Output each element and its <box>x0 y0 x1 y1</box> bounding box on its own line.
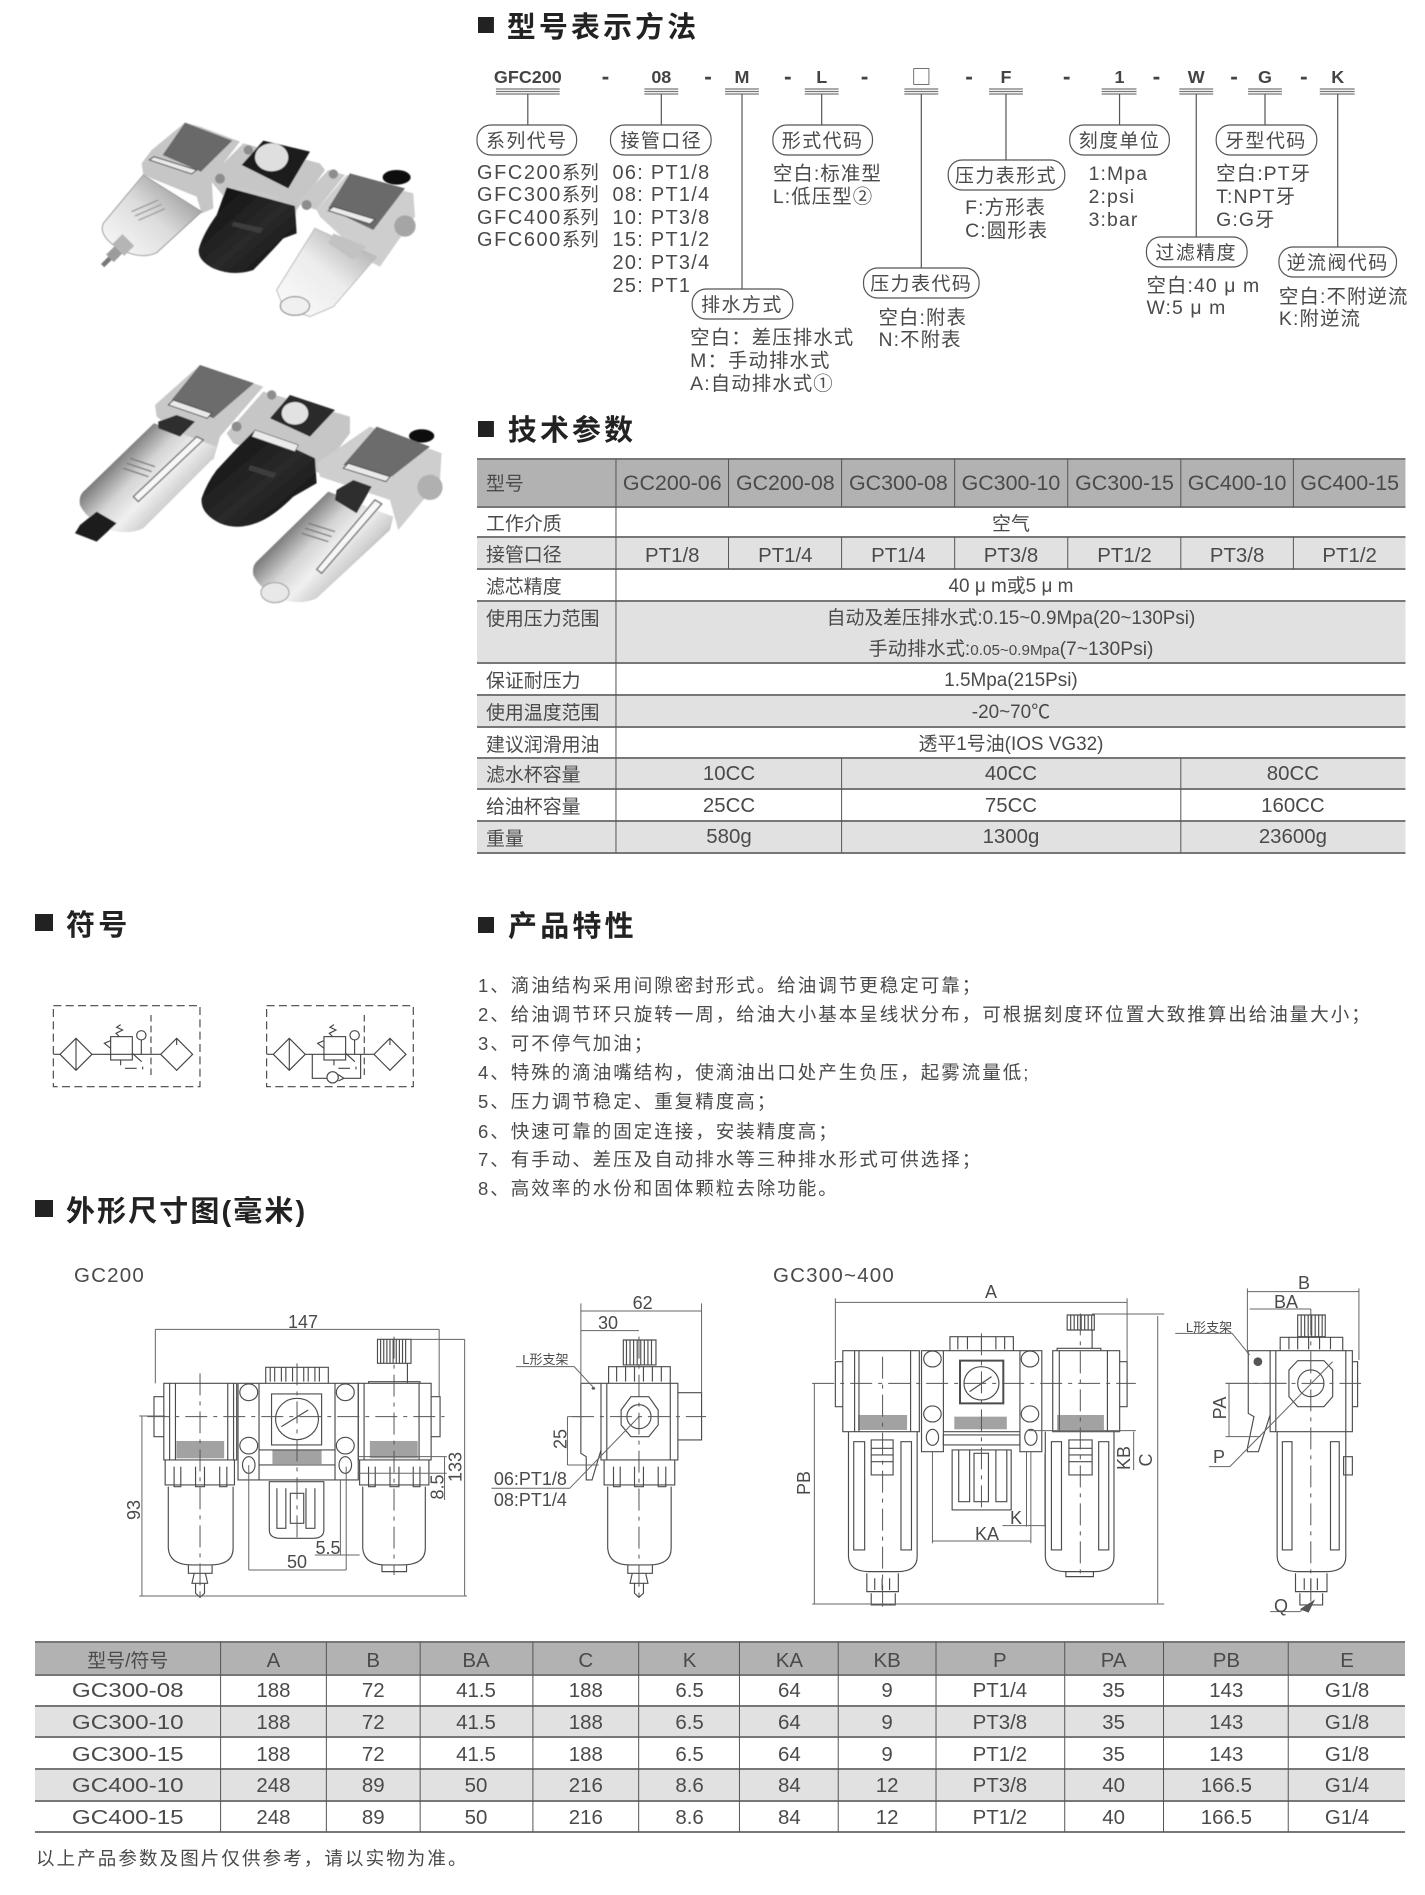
table: dimensions: 84 <box>778 1774 801 1797</box>
dimension labels: GC200: 93 <box>124 1500 144 1520</box>
table: dimensions: 35 <box>1102 1743 1125 1766</box>
label: GC200: GC200 <box>74 1264 145 1287</box>
table: dimensions: 166.5 <box>1201 1774 1252 1797</box>
table: dimensions: 188 <box>256 1711 291 1734</box>
text block: feature list: 6、快速可靠的固定连接，安装精度高； <box>478 1121 839 1142</box>
table: dimensions: 72 <box>362 1743 385 1766</box>
panel: technical parameters <box>477 415 1405 853</box>
dimension labels: GC200: 5.5 <box>315 1538 341 1558</box>
table: technical parameters: -20~70℃ <box>972 702 1050 723</box>
table: dimensions: 6.5 <box>675 1711 704 1734</box>
code string <box>494 61 1355 289</box>
table: dimensions: PT1/4 <box>973 1679 1027 1702</box>
table: technical parameters: 25CC <box>703 794 755 817</box>
table: dimensions: 188 <box>256 1679 291 1702</box>
table: dimensions: K <box>683 1649 697 1672</box>
drawing: GC200 front view <box>139 1329 467 1600</box>
dimension labels: GC200: 8.5 <box>428 1474 448 1500</box>
callout: check valve code: 逆流阀代码 <box>1287 252 1389 274</box>
code string: - <box>602 63 609 89</box>
text block: feature list: 4、特殊的滴油嘴结构，使滴油出口处产生负压，起雾流量低; <box>478 1062 1030 1083</box>
table: technical parameters: 建议润滑用油 <box>486 734 599 756</box>
table: technical parameters: 1300g <box>983 825 1039 848</box>
table: dimensions: 9 <box>881 1743 893 1766</box>
text block: feature list: 8、高效率的水份和固体颗粒去除功能。 <box>478 1178 839 1199</box>
dimension labels: GC300~400: B <box>1298 1273 1310 1293</box>
drawing: GC300~400 side view <box>1175 1288 1361 1613</box>
code string: GFC200 <box>494 67 562 87</box>
table: technical parameters: PT3/8 <box>984 544 1038 567</box>
dimension labels: GC300~400: Q <box>1274 1596 1288 1616</box>
table: dimensions: 9 <box>881 1679 893 1702</box>
callout: check valve code: K:附逆流 <box>1279 308 1361 330</box>
table: technical parameters: GC300-10 <box>962 471 1060 495</box>
callout: gauge form: 压力表形式 <box>955 165 1057 187</box>
dimension labels: GC200: 147 <box>288 1312 318 1332</box>
dimension labels: GC200: 62 <box>633 1293 653 1313</box>
table: dimensions: 35 <box>1102 1711 1125 1734</box>
dimension labels: GC200 <box>124 1293 653 1572</box>
table: dimensions: KA <box>776 1649 803 1672</box>
text block: feature list: 3、可不停气加油； <box>478 1033 654 1054</box>
table: dimensions: 216 <box>569 1774 603 1797</box>
table: dimensions: PT1/2 <box>973 1743 1027 1766</box>
dimension labels: GC300~400: BA <box>1274 1292 1298 1312</box>
table: technical parameters: 75CC <box>985 794 1037 817</box>
table: dimensions: 35 <box>1102 1679 1125 1702</box>
heading: product features: 产品特性 <box>508 910 637 943</box>
table: dimensions: 188 <box>256 1743 291 1766</box>
table: dimensions: G1/4 <box>1325 1806 1369 1829</box>
code string: L <box>816 67 827 87</box>
table: dimensions: 64 <box>778 1743 801 1766</box>
callout: thread code: 牙型代码 <box>1225 130 1307 152</box>
callout: form code <box>773 125 882 208</box>
code string: - <box>861 63 868 89</box>
heading: outline dimensions: 外形尺寸图(毫米) <box>66 1195 307 1228</box>
table: technical parameters: PT1/2 <box>1322 544 1377 567</box>
code string: M <box>735 67 749 87</box>
code string: W <box>1188 67 1205 87</box>
dimension labels: GC300~400: KB <box>1114 1446 1134 1470</box>
callout: drain type: 排水方式 <box>701 294 783 316</box>
callout: form code: 空白:标准型 <box>773 163 882 185</box>
callout: drain type <box>690 289 854 395</box>
table: technical parameters: 接管口径 <box>486 544 562 566</box>
callout: scale unit: 1:Mpa <box>1089 163 1148 185</box>
dimension labels: GC300~400: P <box>1213 1447 1225 1467</box>
table: dimensions: A <box>267 1649 281 1672</box>
drawing: GC200 <box>74 1264 706 1600</box>
table: technical parameters: PT1/8 <box>645 544 699 567</box>
dimension labels: GC300~400: C <box>1136 1454 1156 1466</box>
table: dimensions: 64 <box>778 1711 801 1734</box>
callout: scale unit: 3:bar <box>1089 209 1138 231</box>
callout: gauge form <box>948 160 1065 242</box>
table: technical parameters: 给油杯容量 <box>486 796 581 818</box>
dimension labels: GC300~400: L形支架 <box>1186 1320 1232 1335</box>
table: dimensions: 72 <box>362 1711 385 1734</box>
dimension labels: GC300~400: KA <box>975 1524 999 1544</box>
callout: port size <box>610 125 711 297</box>
icon: circuit symbol standard <box>53 1006 200 1087</box>
dimension labels: GC200: 08:PT1/4 <box>494 1490 567 1510</box>
table: technical parameters: 空气 <box>992 513 1030 535</box>
code string: - <box>1063 63 1071 89</box>
table: dimensions: 型号/符号 <box>87 1650 168 1672</box>
callout: drain type: 空白：差压排水式 <box>690 327 854 349</box>
dimension labels: GC300~400: A <box>985 1282 997 1302</box>
table: dimensions: 40 <box>1102 1806 1125 1829</box>
dimension labels: GC300~400: PA <box>1210 1397 1230 1419</box>
table: technical parameters: PT1/4 <box>871 544 926 567</box>
callout: drain type: M：手动排水式 <box>690 350 831 372</box>
callout: series code: GFC400系列 <box>477 207 599 229</box>
table: dimensions: 248 <box>256 1774 291 1797</box>
table: dimensions: 40 <box>1102 1774 1125 1797</box>
dimension labels: GC200: 25 <box>550 1429 570 1449</box>
icon: circuit symbol with check valve <box>267 1006 413 1087</box>
callout: scale unit <box>1070 125 1169 231</box>
callout: gauge code <box>864 268 979 351</box>
dimension labels: GC300~400: PB <box>794 1471 814 1495</box>
table: dimensions: 8.6 <box>675 1806 704 1829</box>
code string: F <box>1001 67 1011 87</box>
table: technical parameters: 透平1号油(IOS VG32) <box>918 733 1103 755</box>
table: technical parameters: 80CC <box>1267 762 1319 785</box>
dimension labels: GC200: 06:PT1/8 <box>494 1469 567 1489</box>
table: dimensions: G1/8 <box>1325 1743 1369 1766</box>
table: technical parameters: GC400-15 <box>1300 471 1399 495</box>
code string: 08 <box>651 67 671 87</box>
callout: thread code: 空白:PT牙 <box>1216 163 1311 185</box>
table: technical parameters: 使用温度范围 <box>486 702 599 724</box>
table: dimensions: 84 <box>778 1806 801 1829</box>
code string: K <box>1331 67 1344 87</box>
code string: G <box>1258 67 1272 87</box>
table: dimensions: G1/4 <box>1325 1774 1369 1797</box>
dimension labels: GC200: 133 <box>446 1452 466 1482</box>
dimension labels: GC300~400: K <box>1010 1508 1022 1528</box>
panel: symbols <box>35 909 413 1087</box>
table: technical parameters: 1.5Mpa(215Psi) <box>944 670 1078 691</box>
table: dimensions: G1/8 <box>1325 1711 1369 1734</box>
table: technical parameters: GC300-08 <box>849 471 948 495</box>
dimension labels: GC200: L形支架 <box>522 1352 569 1367</box>
callout: thread code <box>1216 125 1317 231</box>
callout: port size: 20: PT3/4 <box>612 252 710 274</box>
callout: check valve code <box>1279 247 1409 330</box>
callout: filter precision: W:5 μ m <box>1146 297 1226 319</box>
callout: gauge form: C:圆形表 <box>965 220 1048 242</box>
table: dimensions: 41.5 <box>456 1679 496 1702</box>
table: technical parameters: 使用压力范围 <box>486 608 599 630</box>
panel: model code <box>477 12 1409 395</box>
callout: port size: 15: PT1/2 <box>612 229 710 251</box>
table: technical parameters: PT3/8 <box>1210 544 1264 567</box>
table: technical parameters: GC300-15 <box>1075 471 1174 495</box>
table: dimensions: GC300-10 <box>72 1711 184 1734</box>
callout: filter precision: 空白:40 μ m <box>1146 275 1260 297</box>
table: dimensions: 50 <box>465 1806 487 1829</box>
table: dimensions <box>35 1642 1405 1832</box>
code string: - <box>1153 63 1160 89</box>
table: dimensions: C <box>578 1649 593 1672</box>
table: dimensions: 72 <box>362 1679 385 1702</box>
table: dimensions: 12 <box>876 1806 898 1829</box>
table: dimensions: 41.5 <box>456 1743 496 1766</box>
dimension labels: GC200: 30 <box>598 1313 618 1333</box>
callout: thread code: G:G牙 <box>1216 209 1276 231</box>
callout: gauge code: 压力表代码 <box>870 273 972 295</box>
table: dimensions: E <box>1340 1649 1354 1672</box>
drawing: GC300~400 front view <box>812 1298 1164 1607</box>
table: technical parameters: 40 μ m或5 μ m <box>949 575 1073 597</box>
callout: series code: GFC600系列 <box>477 229 599 251</box>
text block: feature list: 2、给油调节环只旋转一周，给油大小基本呈线状分布，可根据刻度环位置大致推算出给油量大小； <box>478 1004 1372 1025</box>
callout: form code: L:低压型② <box>773 186 873 208</box>
table: technical parameters: 自动及差压排水式:0.15~0.9Mpa(20~130Psi) <box>827 607 1195 629</box>
callout: form code: 形式代码 <box>782 130 864 152</box>
table: technical parameters: PT1/4 <box>758 544 813 567</box>
table: dimensions: PA <box>1101 1649 1127 1672</box>
table: dimensions: 12 <box>876 1774 898 1797</box>
label: GC300~400: GC300~400 <box>773 1264 895 1287</box>
table: technical parameters: GC200-06 <box>623 471 722 495</box>
drawing: GC300~400 <box>773 1264 1361 1616</box>
table: dimensions: GC300-15 <box>72 1743 184 1766</box>
callout: check valve code: 空白:不附逆流 <box>1279 286 1409 308</box>
table: technical parameters: 保证耐压力 <box>486 670 581 692</box>
callout: gauge code: 空白:附表 <box>878 307 967 329</box>
table: dimensions: 143 <box>1209 1679 1243 1702</box>
table: technical parameters: 23600g <box>1259 825 1327 848</box>
table: dimensions: 89 <box>362 1774 385 1797</box>
code string: - <box>704 63 712 89</box>
text block: feature list: 5、压力调节稳定、重复精度高； <box>478 1091 777 1112</box>
table: technical parameters: 滤芯精度 <box>486 576 562 598</box>
callout: filter precision <box>1146 237 1260 319</box>
code string: - <box>784 63 792 89</box>
table: dimensions: 143 <box>1209 1743 1243 1766</box>
table: dimensions: PT3/8 <box>973 1711 1027 1734</box>
callout: series code: GFC300系列 <box>477 184 599 206</box>
callout: scale unit: 2:psi <box>1089 186 1135 208</box>
table: dimensions: 188 <box>569 1679 603 1702</box>
callout: port size: 10: PT3/8 <box>612 207 710 229</box>
callout: drain type: A:自动排水式① <box>690 373 834 395</box>
callout: series code: 系列代号 <box>486 130 568 152</box>
drawing: GC200 side view <box>491 1303 706 1600</box>
table: dimensions: KB <box>873 1649 901 1672</box>
table: dimensions: 8.6 <box>675 1774 704 1797</box>
callout: gauge form: F:方形表 <box>965 197 1046 219</box>
text block: feature list: 1、滴油结构采用间隙密封形式。给油调节更稳定可靠； <box>478 975 982 996</box>
code string: 1 <box>1115 67 1125 87</box>
table: technical parameters: 工作介质 <box>486 513 562 535</box>
dimension labels: GC300~400 <box>794 1273 1310 1616</box>
footnote: 以上产品参数及图片仅供参考，请以实物为准。 <box>36 1848 469 1869</box>
table: dimensions: PT3/8 <box>973 1774 1027 1797</box>
code string: - <box>1230 63 1238 89</box>
table: technical parameters: 型号 <box>486 473 524 495</box>
text block: feature list <box>478 975 1372 1199</box>
table: dimensions: G1/8 <box>1325 1679 1369 1702</box>
dimension labels: GC200: 50 <box>287 1552 307 1572</box>
callout: port size: 25: PT1 <box>612 275 691 297</box>
table: dimensions: 64 <box>778 1679 801 1702</box>
table: technical parameters: 重量 <box>486 828 524 850</box>
table: dimensions: P <box>993 1649 1007 1672</box>
table: dimensions: 216 <box>569 1806 603 1829</box>
table: dimensions: GC400-15 <box>72 1806 184 1829</box>
table: dimensions: GC400-10 <box>72 1774 184 1797</box>
table: technical parameters: 160CC <box>1261 794 1325 817</box>
heading: symbols <box>35 909 130 942</box>
product photo: clear-bowl unit <box>102 123 416 317</box>
table: dimensions: 188 <box>569 1711 603 1734</box>
table: technical parameters: 手动排水式:0.05~0.9Mpa(7~130Psi) <box>869 638 1153 660</box>
table: dimensions: B <box>366 1649 380 1672</box>
table: technical parameters: 40CC <box>985 762 1037 785</box>
code string: □ <box>911 61 931 90</box>
heading: symbols: 符号 <box>66 909 130 942</box>
callout: filter precision: 过滤精度 <box>1155 242 1237 264</box>
table: technical parameters: GC200-08 <box>736 471 835 495</box>
table: technical parameters <box>477 459 1405 853</box>
table: dimensions: 6.5 <box>675 1679 704 1702</box>
callout: series code <box>477 125 599 251</box>
table: dimensions: 143 <box>1209 1711 1243 1734</box>
table: dimensions: 50 <box>465 1774 487 1797</box>
table: technical parameters: GC400-10 <box>1188 471 1287 495</box>
table: dimensions: 89 <box>362 1806 385 1829</box>
table: technical parameters: 580g <box>706 825 752 848</box>
table: dimensions: 166.5 <box>1201 1806 1252 1829</box>
product photo: metal-bowl unit <box>75 365 443 603</box>
text block: feature list: 7、有手动、差压及自动排水等三种排水形式可供选择； <box>478 1149 982 1170</box>
table: dimensions: GC300-08 <box>72 1679 184 1702</box>
table: dimensions: 41.5 <box>456 1711 496 1734</box>
heading: model code: 型号表示方法 <box>507 12 699 44</box>
table: dimensions: 9 <box>881 1711 893 1734</box>
code string: - <box>965 63 973 89</box>
panel: product features <box>478 910 1372 1199</box>
table: dimensions: 248 <box>256 1806 291 1829</box>
table: dimensions: BA <box>462 1649 490 1672</box>
heading: technical parameters: 技术参数 <box>508 415 636 447</box>
table: dimensions: PB <box>1213 1649 1240 1672</box>
callout: port size: 06: PT1/8 <box>612 162 710 184</box>
callout: series code: GFC200系列 <box>477 162 599 184</box>
callout: port size: 08: PT1/4 <box>612 184 710 206</box>
table: dimensions: 6.5 <box>675 1743 704 1766</box>
code string: - <box>1300 63 1308 89</box>
table: technical parameters: PT1/2 <box>1097 544 1152 567</box>
callout: gauge code: N:不附表 <box>878 329 962 351</box>
table: technical parameters: 10CC <box>703 762 755 785</box>
table: dimensions: PT1/2 <box>973 1806 1027 1829</box>
callout: port size: 接管口径 <box>620 130 702 152</box>
table: dimensions: 188 <box>569 1743 603 1766</box>
table: technical parameters: 滤水杯容量 <box>486 764 581 786</box>
callout: scale unit: 刻度单位 <box>1079 130 1160 152</box>
callout: thread code: T:NPT牙 <box>1216 186 1296 208</box>
